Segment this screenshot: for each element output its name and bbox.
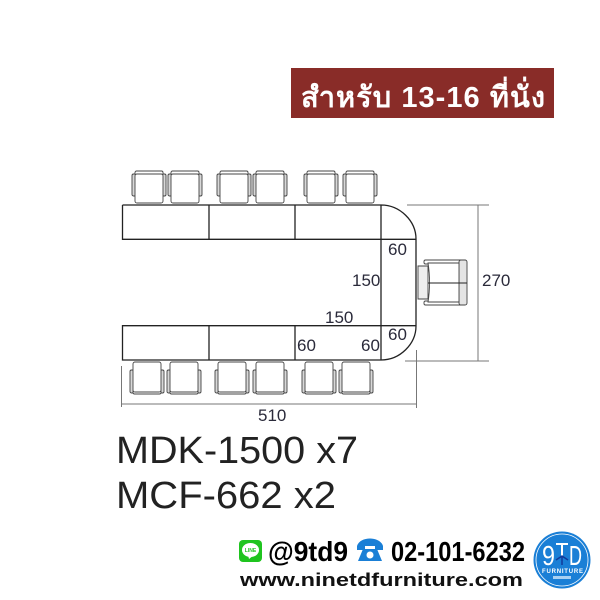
heading badge — [291, 68, 554, 118]
logo badge: D — [569, 540, 582, 571]
logo badge: FURNITURE — [542, 569, 583, 575]
phone number: 02-101-6232 — [391, 536, 525, 567]
dimension labels: 270 — [482, 271, 510, 290]
dimension labels — [258, 240, 510, 425]
dimension lines — [121, 205, 489, 408]
logo badge — [534, 532, 590, 588]
dimension labels: 150 — [352, 271, 380, 290]
floor plan table — [122, 205, 416, 360]
LINE handle: @9td9 — [268, 536, 348, 567]
dimension labels: 60 — [297, 336, 316, 355]
bottom row chairs — [130, 362, 373, 394]
model quantity text: MCF-662 x2 — [116, 475, 336, 517]
dimension labels: 60 — [388, 240, 407, 259]
dimension labels: 60 — [388, 325, 407, 344]
website: www.ninetdfurniture.com — [239, 570, 523, 590]
icon: telephone — [357, 538, 383, 561]
dimension labels: 510 — [258, 406, 286, 425]
side chair — [418, 260, 467, 305]
top row chairs — [132, 171, 377, 203]
icon: LINE — [239, 540, 262, 562]
icon: LINE: LINE — [245, 548, 257, 554]
logo badge: 9 — [542, 540, 555, 571]
model quantity text — [116, 430, 358, 517]
dimension labels: 150 — [325, 308, 353, 327]
model quantity text: MDK-1500 x7 — [116, 430, 358, 472]
heading badge: สำหรับ 13-16 ที่นั่ง — [301, 76, 545, 114]
dimension labels: 60 — [361, 336, 380, 355]
